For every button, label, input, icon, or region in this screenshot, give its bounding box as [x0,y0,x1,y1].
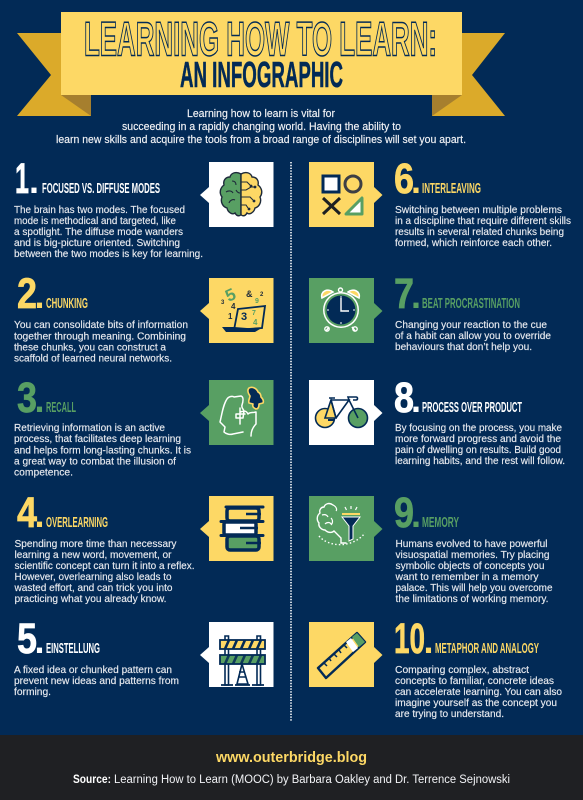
icon: shapes [309,162,382,227]
panel: 3 recall: Retrieving information is an active [14,423,165,434]
panel: 8 process over product [309,374,565,467]
icon: laptop with numbers: 9 [255,298,259,305]
panel: 10 metaphor and analogy [309,615,562,720]
panel: 5 einstellung: A fixed idea or chunked pattern can [14,665,172,676]
icon: bicycle [309,380,382,445]
panel: 3 recall [14,374,274,478]
panel: 6 interleaving: . [411,160,421,201]
intro text: Learning how to learn is vital for [187,108,335,120]
icon: laptop with numbers: 1 [228,312,233,321]
panel: 4 overlearning: . [34,494,45,535]
panel: 6 interleaving: Switching between multiple problems [395,205,562,216]
panel: 5 einstellung: 5 [17,615,37,663]
panel: 4 overlearning [14,489,274,605]
panel: 5 einstellung: . [34,620,45,661]
icon: laptop with numbers: & [246,289,253,299]
panel: 1 focused vs diffuse modes: The brain has two modes. The focused [14,205,185,216]
panel: 9 memory: want to remember in a memory [394,572,539,583]
panel: 1 focused vs diffuse modes: and is big-picture oriented. Switching [14,238,180,249]
panel: 6 interleaving [309,155,571,249]
panel: 5 einstellung: prevent new ideas and patterns from [14,676,179,687]
panel: 7 beat procrastination: . [411,275,421,316]
footer: Learning How to Learn (MOOC) by Barbara Oakley and Dr. Terrence Sejnowski [114,774,510,786]
panel: 10 metaphor and analogy: 10 [394,615,425,663]
panel: 5 einstellung: EINSTELLUNG [46,641,100,657]
panel: 4 overlearning: However, overlearning also leads to [14,572,172,583]
icon: laptop with numbers [200,278,274,343]
panel: 8 process over product: learning habits, and the rest will follow. [395,456,565,467]
panel: 3 recall: competence. [14,468,73,478]
icon: ruler [309,622,382,687]
icon: stacked books [200,496,274,561]
footer: Source: [73,774,111,786]
footer: www.outerbridge.blog [215,750,367,766]
panel: 8 process over product: By focusing on the process, you make [395,423,562,434]
panel: 1 focused vs diffuse modes: mode is methodical and targeted, like [14,216,176,227]
panel: 5 einstellung: forming. [14,687,51,698]
icon: brain [200,162,274,227]
panel: 6 interleaving: INTERLEAVING [422,181,481,197]
panel: 10 metaphor and analogy: can accelerate learning. You can also [395,687,562,698]
panel: 5 einstellung [14,615,274,698]
icon: laptop with numbers: 7 [252,310,256,317]
panel: 4 overlearning: OVERLEARNING [46,515,108,531]
icon: laptop with numbers: 3 [241,311,247,323]
panel: 9 memory: palace. This will help you overcome [396,583,553,594]
panel: 4 overlearning: practicing what you already know. [14,594,166,605]
panel: 6 interleaving: formed, which reinforce each other. [395,238,552,249]
panel: 7 beat procrastination: of a habit can allow you to override [395,331,551,342]
panel: 4 overlearning: 4 [17,489,37,537]
panel: 6 interleaving: 6 [394,155,414,203]
intro text: succeeding in a rapidly changing world. Having the ability to [122,121,401,133]
panel: 3 recall: and helps form long-lasting chunks. It is [14,446,191,456]
icon: laptop with numbers: 2 [260,292,264,298]
panel: 4 overlearning: Spending more time than necessary [14,539,177,550]
panel: 2 chunking: together through meaning. Combining [14,332,186,342]
icon: laptop with numbers: 5 [222,284,239,306]
panel: 10 metaphor and analogy: concepts to familiar, concrete ideas [395,676,554,687]
panel: 2 chunking [14,270,274,364]
icon: laptop with numbers: 4 [231,302,236,311]
panel: 4 overlearning: scientific concept can turn it into a reflex. [14,561,194,572]
panel: 9 memory: 9 [394,489,414,537]
panel: 8 process over product: pain of dwelling on results. Build good [395,445,561,456]
panel: 3 recall: a great way to combat the illusion of [14,456,176,468]
panel: 1 focused vs diffuse modes: 1 [15,155,29,203]
panel: 9 memory: visuospatial memories. Try placing [396,550,550,561]
panel: 7 beat procrastination: 7 [394,270,414,318]
panel: 2 chunking: You can consolidate bits of information [14,320,188,331]
panel: 4 overlearning: learning a new word, movement, or [14,550,172,561]
icon: brain and funnel [309,496,382,561]
panel: 8 process over product: 8 [394,374,414,422]
panel: 9 memory: Humans evolved to have powerful [396,539,548,550]
footer [0,735,583,800]
panel: 1 focused vs diffuse modes [14,155,274,260]
intro text: learn new skills and acquire the tools from a broad range of disciplines will set you apart. [56,134,466,146]
panel: 2 chunking: CHUNKING [46,296,88,312]
panel: 6 interleaving: in a discipline that require different skills [395,216,571,227]
panel: 3 recall: . [34,379,45,420]
title ribbon [17,12,505,116]
panel: 1 focused vs diffuse modes: a spotlight. The diffuse mode wanders [14,227,183,238]
panel: 9 memory: . [411,494,421,535]
panel: 3 recall: process, that facilitates deep learning [14,434,181,445]
panel: 7 beat procrastination [309,270,551,353]
icon: laptop with numbers: 3 [221,300,225,306]
icon: road barrier [200,622,274,687]
panel: 2 chunking: . [34,275,45,316]
icon: head puzzle [200,380,274,445]
panel: 9 memory [309,489,553,605]
panel: 2 chunking: these chunks, you can construct a [14,342,166,354]
panel: 8 process over product: more forward progress and avoid the [395,434,561,445]
title ribbon: AN INFOGRAPHIC [180,54,343,95]
panel: 3 recall: 3 [17,374,37,422]
panel: 8 process over product: . [411,379,421,420]
panel: 9 memory: symbolic objects of concepts you [396,561,544,572]
panel: 10 metaphor and analogy: Comparing complex, abstract [395,665,529,676]
panel: 1 focused vs diffuse modes: between the two modes is key for learning. [14,249,203,260]
panel: 4 overlearning: wasted effort, and can trick you into [14,583,173,594]
panel: 7 beat procrastination: behaviours that don’t help you. [395,342,532,353]
intro text [56,108,466,146]
panel: 9 memory: the limitations of working memory. [396,594,548,605]
panel: 6 interleaving: results in several related chunks being [395,227,564,238]
panel: 7 beat procrastination: Changing your reaction to the cue [395,320,547,331]
panel: 1 focused vs diffuse modes: FOCUSED VS. DIFFUSE MODES [42,181,160,197]
panel: 9 memory: MEMORY [422,515,459,531]
panel: 1 focused vs diffuse modes: . [29,160,39,201]
icon: alarm clock [309,278,382,343]
panel: 10 metaphor and analogy: imagine yourself as the concept you [395,698,557,709]
panel: 10 metaphor and analogy: . [424,620,434,661]
panel: 3 recall: RECALL [46,400,76,416]
icon: laptop with numbers: 4 [253,318,258,327]
panel: 2 chunking: 2 [17,270,37,318]
panel: 2 chunking: scaffold of learned neural networks. [14,354,172,364]
panel: 10 metaphor and analogy: are trying to understand. [395,709,504,720]
